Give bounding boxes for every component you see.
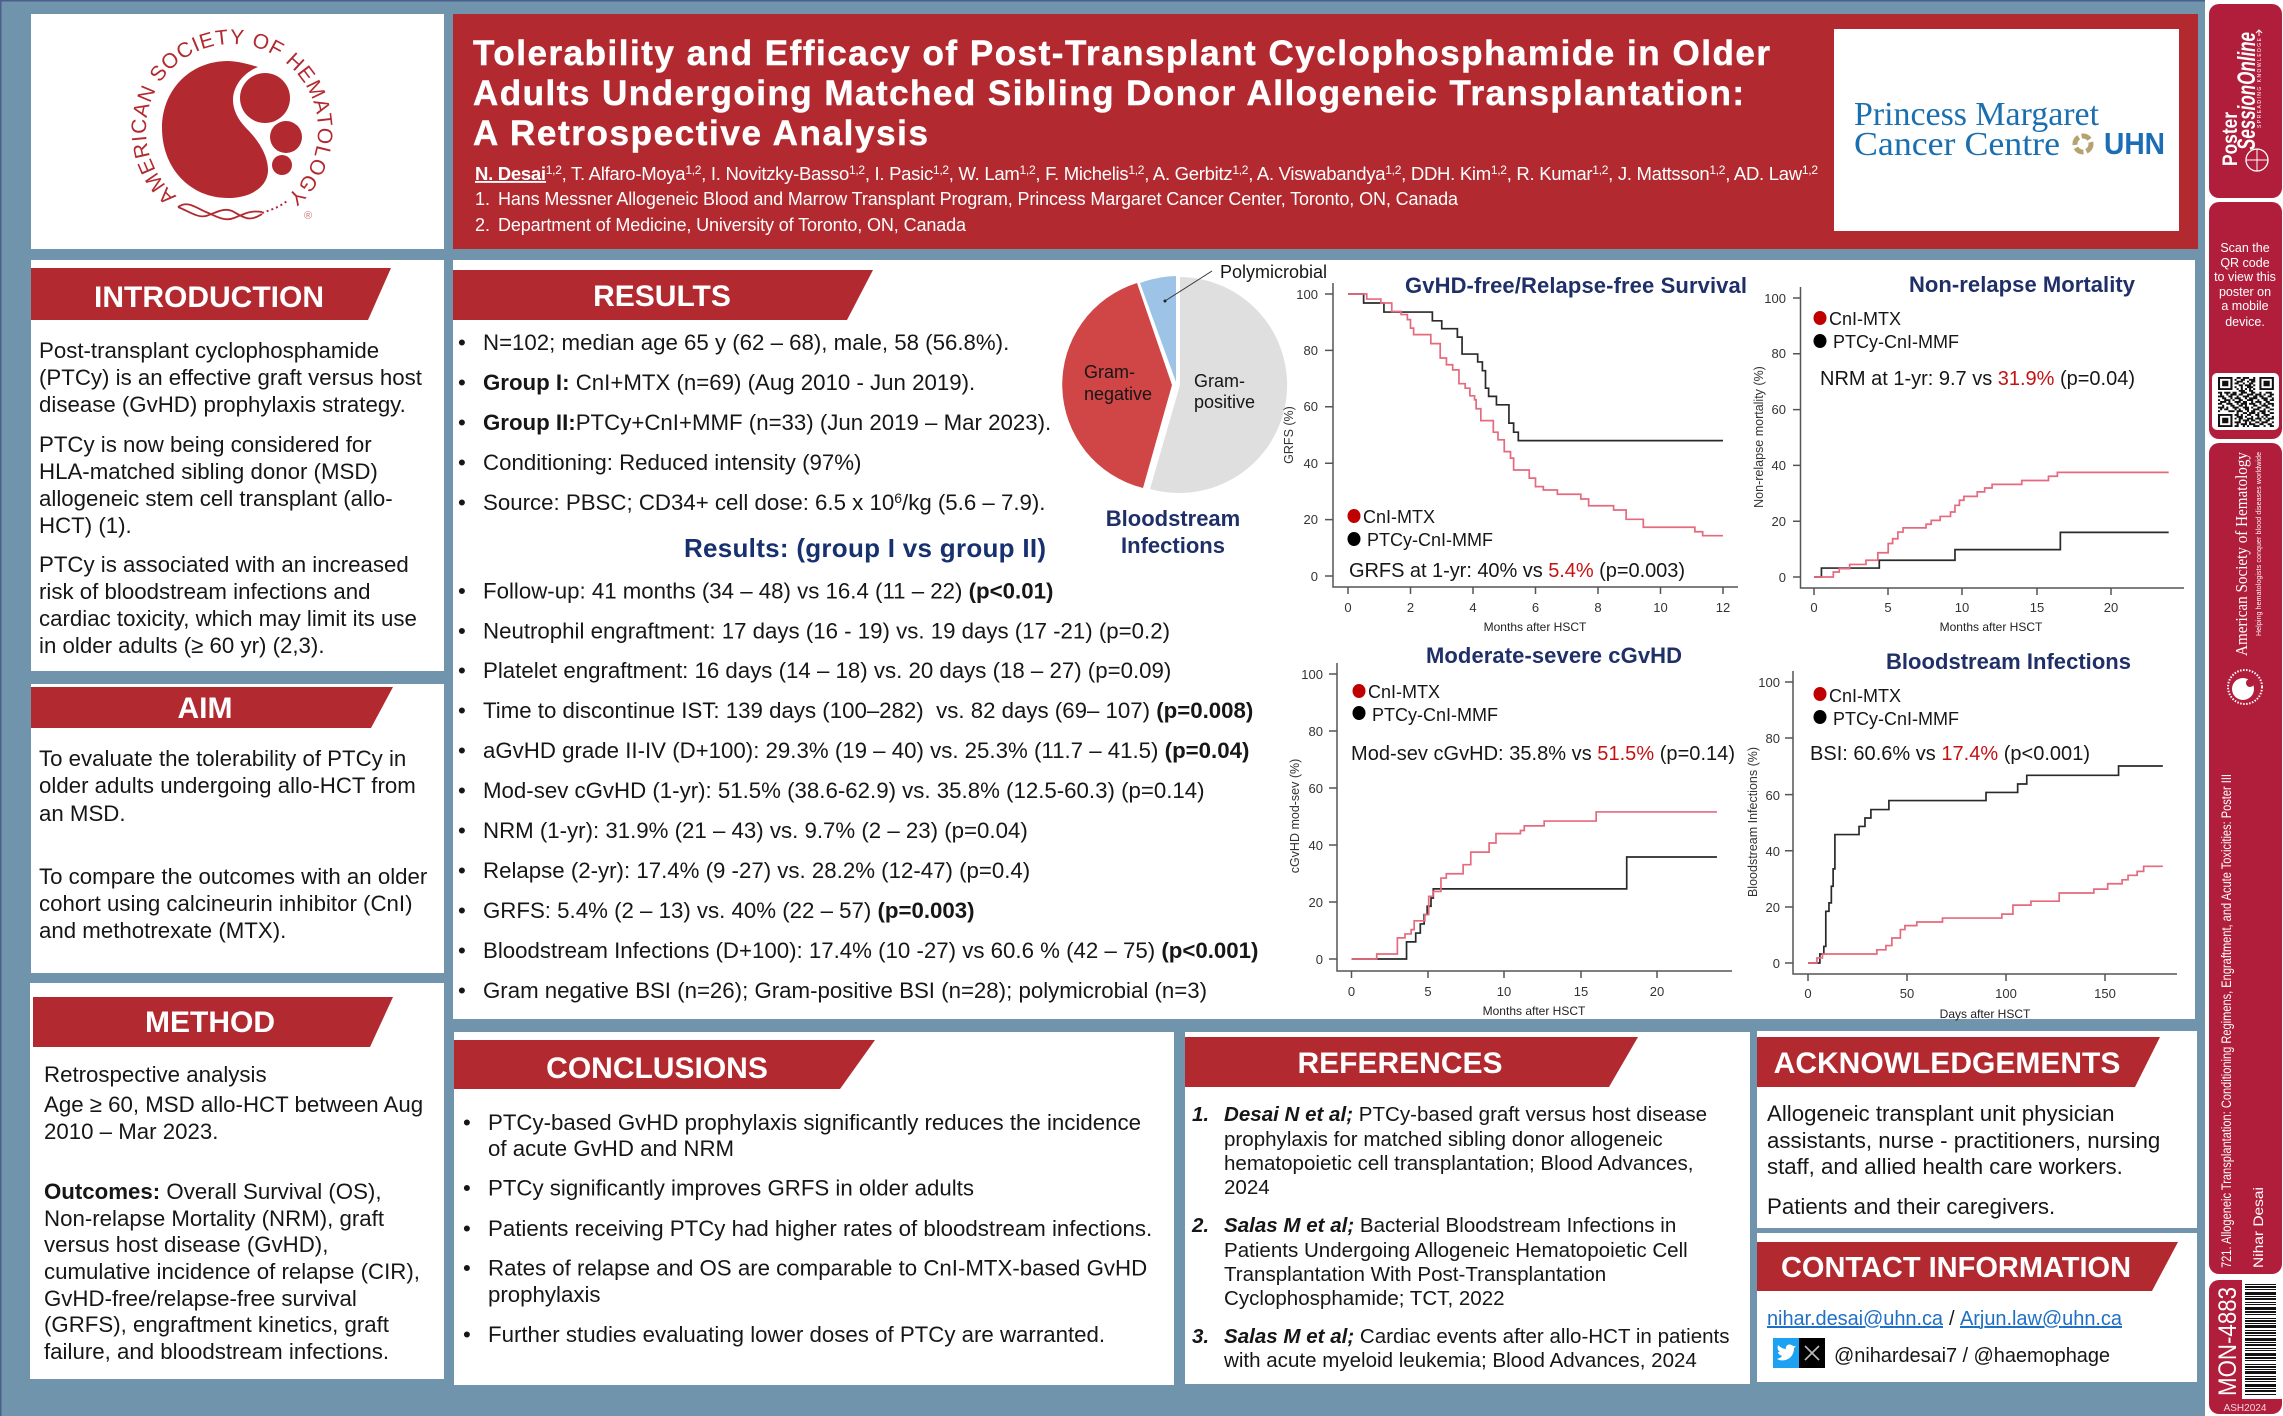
- list: references: Cyclophosphamide; TCT, 2022: [1224, 1287, 1505, 1310]
- list: outcomes comparison: •: [458, 938, 466, 963]
- chart: bloodstream infections: 60: [1766, 788, 1780, 803]
- chart: moderate-severe chronic GvHD: cGvHD mod-sev (%): [1288, 759, 1302, 873]
- chart: non-relapse mortality: 100: [1764, 291, 1786, 306]
- chart: moderate-severe chronic GvHD: Months after HSCT: [1483, 1004, 1586, 1018]
- authors: 1,2: [1232, 163, 1249, 177]
- list: conclusions: •: [463, 1176, 471, 1200]
- text: method: Age ≥ 60, MSD allo-HCT between Aug: [44, 1092, 423, 1117]
- chart: bloodstream infections: 80: [1766, 731, 1780, 746]
- sidebar: society and session information: Helping hematologists conquer blood diseases worldwide: [2256, 452, 2263, 636]
- text: introduction: [39, 338, 423, 658]
- list: outcomes comparison: [458, 578, 1258, 1003]
- list: conclusions: prophylaxis: [488, 1282, 601, 1307]
- list: outcomes comparison: aGvHD grade II-IV (D+100): 29.3% (19 – 40) vs. 25.3% (11.7 – 41.5) (p=0.04): [483, 738, 1249, 763]
- list: outcomes comparison: •: [458, 898, 466, 923]
- chart: non-relapse mortality: 0: [1779, 570, 1786, 585]
- text: method: 2010 – Mar 2023.: [44, 1119, 218, 1144]
- list: outcomes comparison: Mod-sev cGvHD (1-yr): 51.5% (38.6-62.9) vs. 35.8% (12.5-60.3) (p=0.14): [483, 778, 1205, 803]
- icon: small ASH logo: [2228, 670, 2262, 704]
- chart: bloodstream infections: 20: [1766, 900, 1780, 915]
- heading: acknowledgements: ACKNOWLEDGEMENTS: [1774, 1047, 2120, 1080]
- authors: , T. Alfaro-Moya: [562, 163, 686, 184]
- text: introduction: cardiac toxicity, which may limit its use: [39, 606, 417, 631]
- list: references: Desai N et al; PTCy-based graft versus host disease: [1224, 1103, 1707, 1126]
- chart: GvHD-free/relapse-free survival: 0: [1311, 569, 1318, 584]
- chart: GvHD-free/relapse-free survival: 2: [1407, 600, 1414, 615]
- text: email addresses: Arjun.law@uhn.ca: [1960, 1308, 2123, 1330]
- chart: non-relapse mortality: CnI-MTX: [1829, 309, 1901, 329]
- list: references: with acute myeloid leukemia; Blood Advances, 2024: [1223, 1349, 1697, 1372]
- list: cohort summary: Source: PBSC; CD34+ cell dose: 6.5 x 10: [483, 490, 894, 515]
- chart: GvHD-free/relapse-free survival: GRFS (%): [1282, 406, 1296, 464]
- text: introduction: in older adults (≥ 60 yr) (2,3).: [39, 633, 325, 658]
- logo: Princess Margaret UHN: Princess Margaret: [1854, 96, 2100, 133]
- list: conclusions: [463, 1110, 1152, 1347]
- chart: bloodstream infections: 150: [2094, 986, 2116, 1001]
- chart: non-relapse mortality: Non-relapse Mortality: [1909, 272, 2136, 297]
- chart: non-relapse mortality: Non-relapse mortality (%): [1752, 366, 1766, 508]
- sidebar: QR code card: poster on: [2219, 285, 2271, 299]
- authors: , I. Novitzky-Basso: [701, 163, 849, 184]
- text: method: (GRFS), engraftment kinetics, graft: [44, 1312, 390, 1337]
- chart: GvHD-free/relapse-free survival: 10: [1653, 600, 1668, 615]
- icon: ASH cell emblem: [162, 61, 302, 219]
- list: outcomes comparison: Relapse (2-yr): 17.4% (9 -27) vs. 28.2% (12-47) (p=0.4): [483, 858, 1030, 883]
- list: outcomes comparison: Neutrophil engraftment: 17 days (16 - 19) vs. 19 days (17 -21) (p=0.2): [483, 618, 1170, 644]
- authors: 1,2: [849, 163, 865, 177]
- list: outcomes comparison: •: [458, 818, 466, 843]
- text: introduction: HCT) (1).: [39, 513, 132, 538]
- logo: Princess Margaret UHN: UHN: [2104, 126, 2165, 161]
- text: method: [44, 1062, 423, 1364]
- chart: GvHD-free/relapse-free survival: 8: [1594, 600, 1602, 615]
- heading: aim: AIM: [178, 692, 232, 725]
- text: method: Non-relapse Mortality (NRM), graft: [44, 1206, 385, 1231]
- panel: references: [1185, 1032, 1750, 1384]
- sidebar: poster number and barcode: ASH2024: [2224, 1403, 2267, 1414]
- text: introduction: allogeneic stem cell transplant (allo-: [39, 486, 393, 511]
- icon: QR code: [2212, 373, 2279, 430]
- list: conclusions: PTCy significantly improves GRFS in older adults: [488, 1176, 974, 1200]
- text: acknowledgements: [1767, 1101, 2160, 1219]
- text: social handles: @nihardesai7 / @haemophage: [1834, 1345, 2110, 1367]
- chart: moderate-severe chronic GvHD: 0: [1316, 952, 1323, 967]
- chart: pie of bloodstream infection types: Gram-: [1194, 371, 1245, 391]
- sidebar: QR code card: [2209, 202, 2282, 439]
- text: acknowledgements: Patients and their caregivers.: [1767, 1194, 2055, 1219]
- chart: GvHD-free/relapse-free survival: Months after HSCT: [1484, 620, 1587, 634]
- sidebar: PosterSessionOnline badge: [2209, 4, 2282, 198]
- heading: contact information: [1757, 1242, 2178, 1291]
- chart: moderate-severe chronic GvHD: 20: [1309, 895, 1323, 910]
- chart: GvHD-free/relapse-free survival: [1282, 273, 1747, 634]
- text: method: Retrospective analysis: [44, 1062, 267, 1087]
- panel: acknowledgements: [1757, 1031, 2197, 1228]
- chart: pie of bloodstream infection types: Gram-: [1084, 362, 1135, 382]
- list: references: [1191, 1103, 1730, 1372]
- text: aim: and methotrexate (MTX).: [39, 918, 286, 943]
- panel: title header: [453, 14, 2198, 249]
- chart: non-relapse mortality: 60: [1772, 402, 1786, 417]
- chart: non-relapse mortality: 0: [1810, 600, 1818, 615]
- list: references: Transplantation With Post-Transplantation: [1224, 1263, 1606, 1286]
- sidebar: QR code card: Scan the: [2220, 241, 2270, 255]
- chart: bloodstream infections: CnI-MTX: [1829, 686, 1901, 706]
- chart: GvHD-free/relapse-free survival: 60: [1304, 399, 1318, 414]
- list: cohort summary: [458, 330, 1051, 515]
- chart: pie of bloodstream infection types: negative: [1084, 384, 1152, 404]
- text: introduction: PTCy is now being considered for: [39, 432, 372, 457]
- text: aim: To compare the outcomes with an older: [39, 864, 428, 889]
- sidebar: QR code card: a mobile: [2221, 299, 2269, 313]
- icon: twitter and X: [1773, 1338, 1825, 1368]
- heading: method: METHOD: [145, 1006, 275, 1039]
- text: method: failure, and bloodstream infections.: [44, 1339, 389, 1364]
- list: cohort summary: •: [458, 450, 466, 475]
- authors: , A. Gerbitz: [1144, 163, 1233, 184]
- list: references: hematopoietic cell transplantation; Blood Advances,: [1224, 1152, 1693, 1175]
- chart: moderate-severe chronic GvHD: 80: [1309, 724, 1323, 739]
- chart: bloodstream infections: 40: [1766, 844, 1780, 859]
- authors: , I. Pasic: [865, 163, 933, 184]
- chart: pie of bloodstream infection types: Bloodstream: [1106, 506, 1240, 531]
- affiliations: 1.: [475, 189, 490, 209]
- authors: 1,2: [1128, 163, 1145, 177]
- chart: non-relapse mortality: 5: [1884, 600, 1892, 615]
- chart: bloodstream infections: 50: [1900, 986, 1914, 1001]
- list: cohort summary: •: [458, 490, 466, 515]
- list: cohort summary: •: [458, 370, 466, 395]
- text: email addresses: [1767, 1308, 2123, 1330]
- text: aim: To evaluate the tolerability of PTCy in: [39, 746, 406, 771]
- chart: bloodstream infections: PTCy-CnI-MMF: [1833, 709, 1959, 729]
- text: introduction: Post-transplant cyclophosphamide: [39, 338, 379, 363]
- chart: bloodstream infections: 100: [1995, 986, 2017, 1001]
- affiliations: Department of Medicine, University of Toronto, ON, Canada: [498, 215, 967, 235]
- chart: bloodstream infections: Bloodstream Infections (%): [1746, 747, 1760, 897]
- title: [473, 34, 1770, 153]
- chart: moderate-severe chronic GvHD: 20: [1650, 984, 1664, 999]
- chart: bloodstream infections: BSI: 60.6% vs 17.4% (p<0.001): [1810, 743, 2090, 765]
- text: email addresses: /: [1949, 1308, 1955, 1330]
- list: conclusions: •: [463, 1322, 471, 1347]
- heading: acknowledgements: [1757, 1037, 2160, 1087]
- subheading: results comparison: Results: (group I vs group II): [684, 533, 1046, 563]
- heading: references: REFERENCES: [1297, 1047, 1503, 1080]
- text: acknowledgements: assistants, nurse - practitioners, nursing: [1767, 1128, 2160, 1153]
- title: Tolerability and Efficacy of Post-Transplant Cyclophosphamide in Older: [473, 34, 1770, 73]
- chart: GvHD-free/relapse-free survival: GvHD-free/Relapse-free Survival: [1405, 273, 1747, 298]
- list: conclusions: •: [463, 1216, 471, 1241]
- logo text ring: AMERICAN SOCIETY OF HEMATOLOGY: [131, 29, 332, 206]
- chart: moderate-severe chronic GvHD: Mod-sev cGvHD: 35.8% vs 51.5% (p=0.14): [1351, 743, 1735, 765]
- chart: non-relapse mortality: 20: [2104, 600, 2118, 615]
- text: method: versus host disease (GvHD),: [44, 1232, 328, 1257]
- list: outcomes comparison: Platelet engraftment: 16 days (14 – 18) vs. 20 days (18 – 27) (p=0.09): [483, 658, 1171, 683]
- heading: method: [33, 997, 393, 1047]
- text: introduction: (PTCy) is an effective graft versus host: [39, 365, 423, 390]
- chart: GvHD-free/relapse-free survival: GRFS at 1-yr: 40% vs 5.4% (p=0.003): [1349, 560, 1685, 582]
- chart: GvHD-free/relapse-free survival: CnI-MTX: [1363, 507, 1435, 527]
- logo: Princess Margaret UHN: [1834, 29, 2179, 231]
- list: conclusions: Patients receiving PTCy had higher rates of bloodstream infections.: [488, 1216, 1152, 1241]
- list: references: Salas M et al; Cardiac events after allo-HCT in patients: [1224, 1325, 1730, 1348]
- text: introduction: risk of bloodstream infections and: [39, 579, 370, 604]
- heading: results: [453, 270, 873, 320]
- list: conclusions: •: [463, 1256, 471, 1280]
- title: Adults Undergoing Matched Sibling Donor Allogeneic Transplantation:: [473, 74, 1744, 113]
- chart: moderate-severe chronic GvHD: 40: [1309, 838, 1323, 853]
- authors: 1,2: [1709, 163, 1726, 177]
- sidebar: PosterSessionOnline badge: SPREADING KNOWLEDGE: [2257, 37, 2263, 128]
- text: aim: cohort using calcineurin inhibitor (CnI): [39, 891, 412, 916]
- chart: pie of bloodstream infection types: Infections: [1121, 533, 1225, 558]
- authors: , J. Mattsson: [1608, 163, 1710, 184]
- list: outcomes comparison: Gram negative BSI (n=26); Gram-positive BSI (n=28); polymicrobial (n=3): [483, 978, 1207, 1003]
- list: cohort summary: Group I: CnI+MTX (n=69) (Aug 2010 - Jun 2019).: [483, 370, 975, 395]
- list: outcomes comparison: •: [458, 978, 466, 1003]
- list: cohort summary: Conditioning: Reduced intensity (97%): [483, 450, 861, 475]
- list: references: 2024: [1224, 1176, 1270, 1199]
- text: introduction: disease (GvHD) prophylaxis strategy.: [39, 392, 406, 417]
- chart: non-relapse mortality: 10: [1955, 600, 1969, 615]
- list: outcomes comparison: Time to discontinue IST: 139 days (100–282) vs. 82 days (69– 107) (p=0.008): [483, 698, 1253, 723]
- chart: moderate-severe chronic GvHD: 5: [1424, 984, 1432, 999]
- list: references: Salas M et al; Bacterial Bloodstream Infections in: [1224, 1214, 1676, 1237]
- heading: aim: [31, 687, 393, 728]
- list: outcomes comparison: NRM (1-yr): 31.9% (21 – 43) vs. 9.7% (2 – 23) (p=0.04): [483, 818, 1028, 843]
- list: cohort summary: 6: [894, 490, 902, 506]
- chart: non-relapse mortality: 40: [1772, 458, 1786, 473]
- panel: results: [453, 260, 2195, 1021]
- list: outcomes comparison: •: [458, 778, 466, 803]
- panel: ASH logo: [31, 14, 444, 249]
- list: conclusions: of acute GvHD and NRM: [488, 1136, 734, 1161]
- affiliations: [475, 189, 1459, 235]
- heading: introduction: INTRODUCTION: [94, 281, 324, 314]
- authors: , R. Kumar: [1507, 163, 1593, 184]
- affiliations: Hans Messner Allogeneic Blood and Marrow Transplant Program, Princess Margaret Cancer Center, Toronto, ON, Canada: [498, 189, 1459, 209]
- list: outcomes comparison: •: [458, 698, 466, 723]
- list: outcomes comparison: Follow-up: 41 months (34 – 48) vs 16.4 (11 – 22) (p<0.01): [483, 578, 1053, 604]
- list: references: 2.: [1191, 1214, 1209, 1237]
- chart: GvHD-free/relapse-free survival: 0: [1344, 600, 1352, 615]
- chart: non-relapse mortality: 20: [1772, 514, 1786, 529]
- chart: bloodstream infections: 100: [1758, 675, 1780, 690]
- authors: N. Desai: [475, 163, 546, 184]
- text: email addresses: nihar.desai@uhn.ca: [1767, 1308, 1944, 1330]
- chart: non-relapse mortality: 15: [2030, 600, 2044, 615]
- sidebar: QR code card: device.: [2225, 315, 2265, 329]
- chart: moderate-severe chronic GvHD: Moderate-severe cGvHD: [1426, 643, 1682, 668]
- text: method: cumulative incidence of relapse (CIR),: [44, 1259, 420, 1284]
- chart: moderate-severe chronic GvHD: 0: [1348, 984, 1355, 999]
- authors: , AD. Law: [1725, 163, 1803, 184]
- chart: moderate-severe chronic GvHD: 15: [1574, 984, 1588, 999]
- chart: pie of bloodstream infection types: [1062, 262, 1327, 558]
- sidebar: society and session information: American Society of Hematology: [2232, 452, 2251, 656]
- list: outcomes comparison: •: [458, 618, 466, 644]
- authors: , DDH. Kim: [1401, 163, 1491, 184]
- chart: non-relapse mortality: Months after HSCT: [1940, 620, 2043, 634]
- chart: GvHD-free/relapse-free survival: 80: [1304, 343, 1318, 358]
- chart: non-relapse mortality: PTCy-CnI-MMF: [1833, 332, 1959, 352]
- chart: non-relapse mortality: 80: [1772, 346, 1786, 361]
- chart: moderate-severe chronic GvHD: 60: [1309, 781, 1323, 796]
- sidebar: society and session information: Nihar Desai: [2251, 1187, 2266, 1268]
- authors: 1,2: [546, 163, 562, 177]
- list: cohort summary: /kg (5.6 – 7.9).: [902, 490, 1046, 515]
- panel: contact information: [1757, 1233, 2197, 1382]
- list: references: Patients Undergoing Allogeneic Hematopoietic Cell: [1224, 1239, 1688, 1262]
- list: references: prophylaxis for matched sibling donor allogeneic: [1224, 1128, 1663, 1151]
- text: method: GvHD-free/relapse-free survival: [44, 1286, 357, 1311]
- chart: bloodstream infections: Bloodstream Infections: [1886, 649, 2131, 674]
- chart: GvHD-free/relapse-free survival: 6: [1532, 600, 1539, 615]
- chart: GvHD-free/relapse-free survival: 100: [1296, 287, 1318, 302]
- chart: moderate-severe chronic GvHD: 10: [1497, 984, 1511, 999]
- chart: moderate-severe chronic GvHD: 100: [1301, 667, 1323, 682]
- chart: pie of bloodstream infection types: positive: [1194, 392, 1255, 412]
- affiliations: 2.: [475, 215, 490, 235]
- chart: GvHD-free/relapse-free survival: 40: [1304, 456, 1318, 471]
- chart: bloodstream infections: 0: [1773, 956, 1780, 971]
- panel: aim: [31, 684, 444, 973]
- authors: 1,2: [933, 163, 949, 177]
- sidebar: society and session information: 721. Allogeneic Transplantation: Conditioning Regimens, Engraftment, and Acute Toxicities: Poster III: [2219, 774, 2234, 1268]
- heading: contact information: CONTACT INFORMATION: [1781, 1252, 2131, 1284]
- authors: 1,2: [1592, 163, 1609, 177]
- text: introduction: PTCy is associated with an increased: [39, 552, 409, 577]
- list: cohort summary: Group II:PTCy+CnI+MMF (n=33) (Jun 2019 – Mar 2023).: [483, 410, 1051, 435]
- list: conclusions: PTCy-based GvHD prophylaxis significantly reduces the incidence: [488, 1110, 1141, 1135]
- list: cohort summary: •: [458, 410, 466, 435]
- list: outcomes comparison: •: [458, 658, 466, 683]
- list: cohort summary: N=102; median age 65 y (62 – 68), male, 58 (56.8%).: [483, 330, 1009, 355]
- text: acknowledgements: staff, and allied health care workers.: [1767, 1154, 2123, 1179]
- text: aim: older adults undergoing allo-HCT from: [39, 773, 416, 798]
- list: outcomes comparison: •: [458, 858, 466, 883]
- logo: Princess Margaret UHN: Cancer Centre: [1854, 126, 2060, 163]
- chart: bloodstream infections: [1746, 649, 2177, 1021]
- sidebar: poster number and barcode: MON-4883: [2214, 1287, 2242, 1396]
- text: acknowledgements: Allogeneic transplant unit physician: [1767, 1101, 2115, 1126]
- list: outcomes comparison: Bloodstream Infections (D+100): 17.4% (10 -27) vs 60.6 % (42 – 75) (p<0.001): [483, 938, 1258, 963]
- sidebar: poster number and barcode: [2209, 1279, 2282, 1414]
- text: introduction: HLA-matched sibling donor (MSD): [39, 459, 378, 484]
- list: outcomes comparison: •: [458, 738, 466, 763]
- panel: introduction: [31, 260, 444, 671]
- chart: non-relapse mortality: [1752, 272, 2184, 634]
- sidebar: PosterSessionOnline badge: Poster: [2219, 112, 2242, 166]
- chart: GvHD-free/relapse-free survival: 12: [1716, 600, 1730, 615]
- list: references: 3.: [1192, 1325, 1209, 1348]
- authors: , F. Michelis: [1035, 163, 1129, 184]
- heading: introduction: [31, 268, 391, 320]
- chart: pie of bloodstream infection types: Polymicrobial: [1220, 262, 1327, 282]
- authors: 1,2: [1385, 163, 1402, 177]
- authors: , A. Viswabandya: [1248, 163, 1386, 184]
- text: method: Outcomes: Overall Survival (OS),: [44, 1179, 382, 1204]
- text: aim: [39, 746, 428, 943]
- chart: moderate-severe chronic GvHD: [1288, 643, 1735, 1018]
- list: outcomes comparison: GRFS: 5.4% (2 – 13) vs. 40% (22 – 57) (p=0.003): [483, 898, 975, 923]
- chart: moderate-severe chronic GvHD: PTCy-CnI-MMF: [1372, 705, 1498, 725]
- chart: bloodstream infections: 0: [1804, 986, 1812, 1001]
- authors: 1,2: [1802, 163, 1818, 177]
- authors: 1,2: [1020, 163, 1036, 177]
- heading: results: RESULTS: [593, 280, 731, 313]
- chart: GvHD-free/relapse-free survival: 20: [1304, 512, 1318, 527]
- chart: bloodstream infections: Days after HSCT: [1940, 1007, 2031, 1021]
- logo text ring: ®: [304, 210, 312, 222]
- chart: GvHD-free/relapse-free survival: PTCy-CnI-MMF: [1367, 530, 1493, 550]
- list: cohort summary: •: [458, 330, 466, 355]
- list: conclusions: Further studies evaluating lower doses of PTCy are warranted.: [488, 1322, 1105, 1347]
- list: conclusions: •: [463, 1110, 471, 1135]
- chart: GvHD-free/relapse-free survival: 4: [1469, 600, 1477, 615]
- panel: method: [30, 983, 444, 1379]
- authors: 1,2: [1491, 163, 1507, 177]
- chart: non-relapse mortality: NRM at 1-yr: 9.7 vs 31.9% (p=0.04): [1820, 368, 2135, 390]
- list: conclusions: Rates of relapse and OS are comparable to CnI-MTX-based GvHD: [488, 1256, 1147, 1280]
- authors: , W. Lam: [949, 163, 1020, 184]
- authors: 1,2: [685, 163, 702, 177]
- sidebar: QR code card: to view this: [2214, 270, 2276, 284]
- text: aim: an MSD.: [39, 801, 126, 826]
- sidebar: society and session information: [2209, 443, 2282, 1274]
- list: references: 1.: [1192, 1103, 1209, 1126]
- chart: moderate-severe chronic GvHD: CnI-MTX: [1368, 682, 1440, 702]
- heading: conclusions: [454, 1040, 875, 1089]
- panel: conclusions: [454, 1032, 1174, 1385]
- list: outcomes comparison: •: [458, 578, 466, 604]
- title: A Retrospective Analysis: [473, 114, 928, 153]
- heading: references: [1185, 1037, 1638, 1087]
- sidebar: QR code card: QR code: [2220, 256, 2270, 270]
- heading: conclusions: CONCLUSIONS: [546, 1052, 768, 1085]
